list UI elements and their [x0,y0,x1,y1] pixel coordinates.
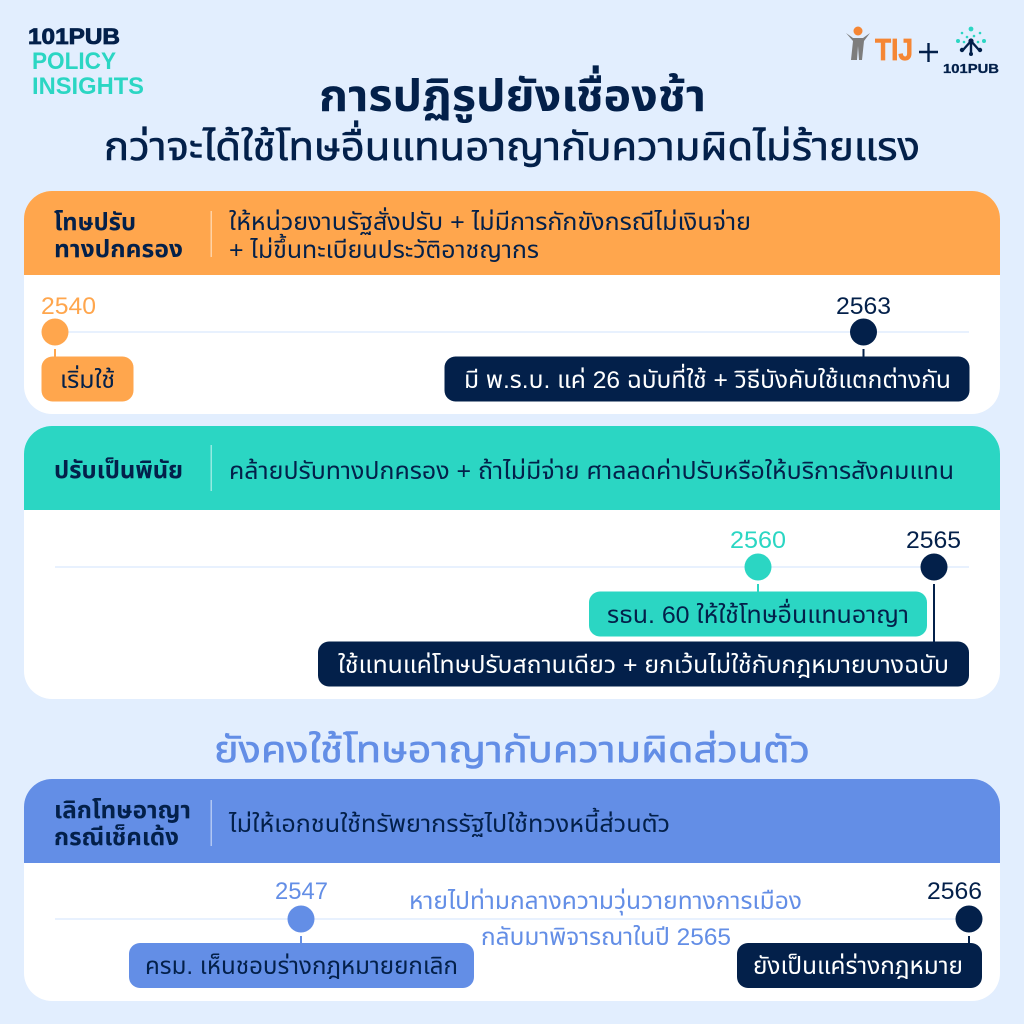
header label: โทษปรับ [54,209,136,236]
year 2565 marker: 2565 [906,527,961,554]
callout: cabinet approval [129,943,474,988]
header description: + ไม่ขึ้นทะเบียนประวัติอาชญากร [229,233,539,264]
callout: 26 acts [444,356,970,402]
icon: TIJ figure [846,26,870,60]
icon: 101PUB network [956,27,986,56]
header label: กรณีเช็คเด้ง [54,823,179,851]
logo: TIJ + 101PUB [846,26,999,76]
header description [229,206,751,264]
header label: ทางปกครอง [54,236,183,263]
callout: still a draft [737,943,982,988]
TIJ wordmark: TIJ [875,32,913,67]
header label [54,209,183,263]
logo: 101PUB Policy Insights: 101PUB [28,24,120,49]
header label [54,797,191,851]
year 2563 marker: 2563 [836,293,891,320]
title [104,65,920,169]
year 2566 marker [927,878,982,946]
header label: เลิกโทษอาญา [54,797,191,824]
note: lost amid political turmoil [409,887,802,951]
header label: ปรับเป็นพินัย [54,457,183,484]
panel: discipline fine [24,426,1000,699]
callout: cabinet approval: ครม. เห็นชอบร่างกฎหมายยกเลิก [145,952,458,980]
logo: 101PUB Policy Insights [28,24,144,100]
year 2547 marker [275,878,328,946]
panel header [24,191,1000,275]
logo: 101PUB Policy Insights: POLICY [32,48,116,75]
callout: RTN 60: รธน. 60 ให้ใช้โทษอื่นแทนอาญา [607,598,909,629]
callout: exceptions: ใช้แทนแค่โทษปรับสถานเดียว + ยกเว้นไม่ใช้กับกฎหมายบางฉบับ [338,651,949,679]
callout: RTN 60 [589,592,927,636]
year 2560 marker [730,527,786,594]
year 2566 marker: 2566 [927,878,982,905]
callout: start [42,356,134,402]
year 2565 marker [906,527,961,644]
panel: bounced cheque [24,779,1000,1001]
callout: start: เริ่มใช้ [60,364,115,394]
panel: administrative fine [24,191,1000,414]
panel header [24,779,1000,863]
header description: ให้หน่วยงานรัฐสั่งปรับ + ไม่มีการกักขังกรณีไม่เงินจ่าย [229,206,751,236]
panel header [24,426,1000,510]
101PUB wordmark: 101PUB [943,61,999,76]
callout: exceptions [318,642,969,686]
title: กว่าจะได้ใช้โทษอื่นแทนอาญากับความผิดไม่ร้ายแรง [104,120,920,169]
year 2540 marker: 2540 [41,293,96,320]
header description: คล้ายปรับทางปกครอง + ถ้าไม่มีจ่าย ศาลลดค่าปรับหรือให้บริการสังคมแทน [229,457,954,485]
logo: 101PUB Policy Insights: INSIGHTS [32,73,144,100]
callout: still a draft: ยังเป็นแค่ร่างกฎหมาย [753,952,963,980]
year 2540 marker [41,293,96,359]
title: การปฏิรูปยังเชื่องช้า [319,65,706,123]
section heading: ยังคงใช้โทษอาญากับความผิดส่วนตัว [214,729,810,770]
note: lost amid political turmoil: หายไปท่ามกลางความวุ่นวายทางการเมือง [409,887,802,916]
year 2560 marker: 2560 [730,527,786,554]
year 2547 marker: 2547 [275,878,328,905]
year 2563 marker [836,293,891,359]
note: lost amid political turmoil: กลับมาพิจารณาในปี 2565 [481,924,731,951]
plus sign [919,43,938,62]
callout: 26 acts: มี พ.ร.บ. แค่ 26 ฉบับที่ใช้ + วิธีบังคับใช้แตกต่างกัน [464,363,951,394]
header description: ไม่ให้เอกชนใช้ทรัพยากรรัฐไปใช้ทวงหนี้ส่วนตัว [228,807,670,838]
